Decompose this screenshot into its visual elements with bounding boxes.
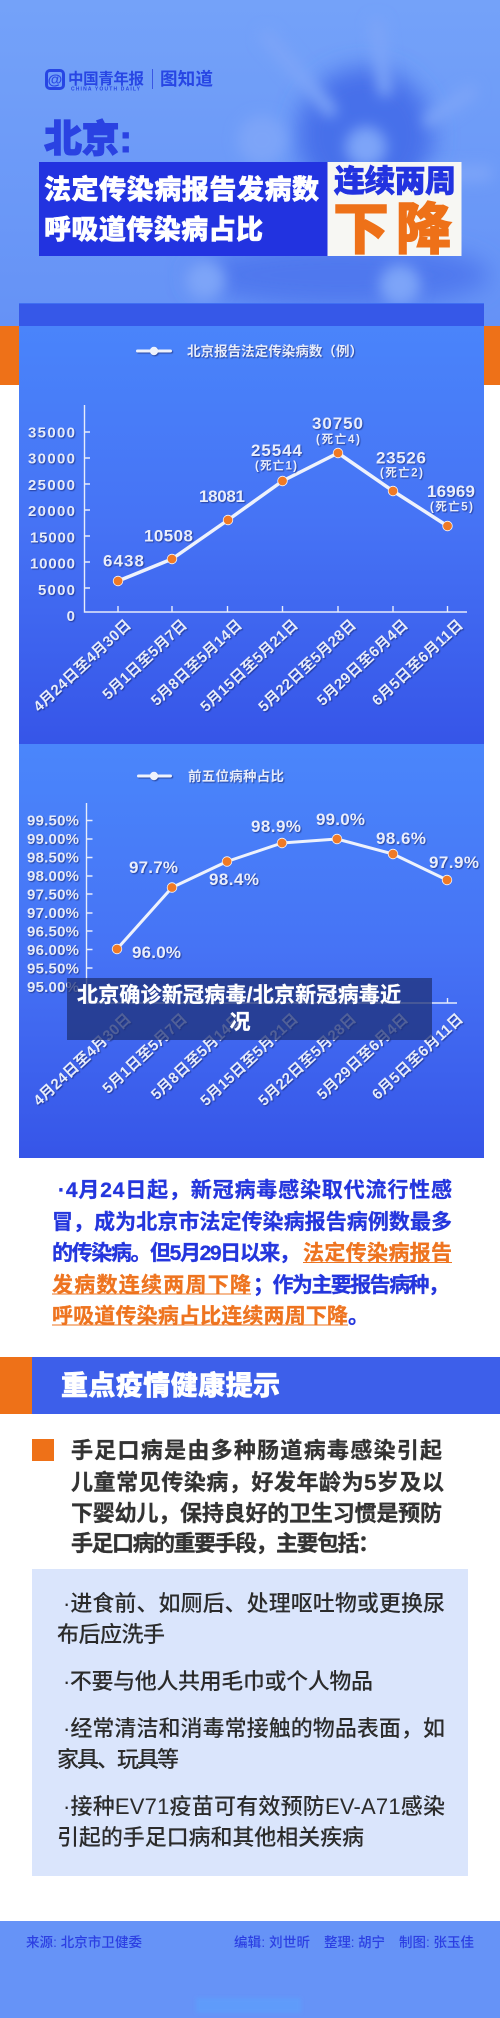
icon: orange square bullet [32, 1439, 54, 1461]
y axis labels [27, 812, 79, 996]
y axis labels: 99.00% [27, 831, 79, 848]
measure 1: ·进食前、如厕后、处理呕吐物或更换尿 [63, 1591, 445, 1616]
overlay caption bar [67, 978, 432, 1040]
callout line 2: 下降 [333, 198, 452, 261]
title panel: subject lines [39, 162, 328, 256]
x axis labels: 5月15日至5月21日 [197, 616, 302, 716]
footer [0, 1921, 500, 2018]
measure 1: 布后应洗手 [57, 1622, 165, 1647]
line series [117, 839, 447, 949]
x axis labels: 5月15日至5月21日 [197, 1010, 302, 1110]
data labels: (死亡5) [430, 500, 473, 514]
data labels: 23526 [376, 448, 426, 468]
intro line 1: 手足口病是由多种肠道病毒感染引起 [71, 1438, 442, 1463]
data labels: 98.4% [209, 870, 259, 889]
summary line 3: 的传染病。但5月29日以来， [52, 1242, 300, 1265]
source credit: 来源: 北京市卫健委 [26, 1934, 142, 1950]
logo english name: CHINA YOUTH DAILY [71, 86, 141, 92]
panel: top five diseases share chart [19, 744, 484, 1158]
caption line 1: 北京确诊新冠病毒/北京新冠病毒近 [77, 983, 401, 1007]
header background with virus [0, 0, 500, 326]
data labels: 97.9% [429, 853, 479, 872]
data labels: 10508 [144, 526, 193, 546]
y axis labels: 96.50% [27, 924, 79, 940]
intro paragraph [71, 1438, 444, 1556]
chart legend: 北京报告法定传染病数（例） [187, 343, 363, 359]
data labels: 18081 [199, 487, 245, 506]
measure 3: ·经常清洁和消毒常接触的物品表面，如 [63, 1716, 445, 1741]
callout line 1: 连续两周 [334, 164, 456, 199]
y axis labels: 96.00% [27, 942, 79, 959]
chart legend [137, 768, 284, 784]
y axis labels: 99.50% [27, 812, 79, 830]
summary line 1: ·4月24日起，新冠病毒感染取代流行性感 [58, 1178, 452, 1202]
summary line 3 [52, 1241, 452, 1265]
x axis labels: 5月1日至5月7日 [99, 1010, 191, 1097]
x axis labels: 5月1日至5月7日 [99, 616, 191, 703]
axes [86, 803, 457, 1003]
y axis labels: 25000 [28, 477, 75, 494]
summary line 5: 。 [348, 1305, 369, 1328]
section heading: health tips [0, 1357, 500, 1414]
measure 4: 引起的手足口病和其他相关疾病 [57, 1825, 364, 1850]
intro line 3: 下婴幼儿，保持良好的卫生习惯是预防 [71, 1501, 442, 1526]
data labels: 96.0% [132, 943, 181, 962]
logo divider [152, 69, 153, 89]
measure 2: ·不要与他人共用毛巾或个人物品 [63, 1669, 373, 1694]
axes [84, 405, 467, 612]
data labels: (死亡1) [255, 458, 297, 472]
measure 1 [57, 1591, 445, 1647]
panel: prevention measures [32, 1569, 468, 1876]
data labels: 98.9% [251, 817, 301, 836]
summary line 2: 冒，成为北京市法定传染病报告病例数最多 [52, 1210, 452, 1234]
summary line 4: ；作为主要报告病种， [253, 1274, 449, 1297]
x axis labels: 5月8日至5月14日 [148, 616, 246, 709]
y axis labels: 98.00% [27, 868, 79, 885]
designer credit: 制图: 张玉佳 [399, 1935, 474, 1950]
y axis labels: 35000 [28, 424, 75, 442]
y axis labels: 97.50% [27, 886, 79, 904]
y axis labels: 15000 [30, 530, 75, 546]
title line 1: 法定传染病报告发病数 [44, 174, 319, 205]
measure 4 [57, 1794, 445, 1850]
column name: 图知道 [160, 69, 214, 89]
caption line 2: 况 [230, 1011, 250, 1034]
line series [118, 453, 448, 581]
y axis labels: 95.00% [27, 979, 79, 996]
measure 4: ·接种EV71疫苗可有效预防EV-A71感染 [63, 1794, 445, 1819]
title: Beijing: 北京: [44, 119, 132, 161]
panel: reported cases chart [19, 303, 484, 744]
data labels: (死亡4) [316, 432, 360, 446]
orange side band right [484, 326, 500, 385]
x axis labels [30, 1010, 467, 1110]
data labels: 98.6% [376, 829, 426, 848]
data labels: 97.7% [129, 858, 178, 877]
data labels: 30750 [312, 414, 363, 433]
intro line 4: 手足口病的重要手段，主要包括： [71, 1531, 380, 1556]
summary paragraph [52, 1178, 452, 1328]
y axis labels: 30000 [28, 450, 75, 468]
data labels: 99.0% [316, 810, 365, 829]
x axis labels [30, 616, 467, 716]
data labels: 6438 [103, 552, 144, 570]
summary line 4 [52, 1274, 449, 1297]
editor credit: 编辑: 刘世昕 [234, 1935, 310, 1950]
x axis labels: 5月22日至5月28日 [255, 616, 360, 716]
icon: at sign: @ [48, 72, 62, 88]
intro line 2: 儿童常见传染病，好发年龄为5岁及以 [71, 1470, 444, 1495]
y axis labels: 20000 [28, 503, 75, 520]
y axis labels [28, 424, 75, 625]
data labels: (死亡2) [380, 466, 423, 480]
logo: China Youth Daily [46, 69, 214, 92]
x axis labels: 5月22日至5月28日 [255, 1010, 360, 1110]
data labels [103, 414, 475, 570]
section heading: health tips: 重点疫情健康提示 [61, 1370, 280, 1401]
y axis labels: 10000 [30, 556, 75, 572]
blurred footer patch [196, 1998, 301, 2013]
summary line 4: 发病数连续两周下降 [52, 1274, 251, 1297]
x axis labels: 4月24日至4月30日 [30, 1010, 135, 1110]
title line 2: 呼吸道传染病占比 [44, 214, 263, 245]
data labels: 16969 [427, 482, 475, 501]
x axis labels: 4月24日至4月30日 [30, 616, 135, 716]
chart legend: 前五位病种占比 [188, 768, 284, 784]
x axis labels: 5月29日至6月4日 [314, 1010, 412, 1103]
x axis labels: 5月29日至6月4日 [314, 616, 412, 709]
measure 3: 家具、玩具等 [57, 1747, 179, 1772]
summary line 5: 呼吸道传染病占比连续两周下降 [52, 1305, 348, 1328]
orange side band left [0, 326, 19, 385]
y axis labels: 95.50% [27, 960, 79, 978]
x axis labels: 6月5日至6月11日 [369, 1010, 467, 1103]
x axis labels: 5月8日至5月14日 [148, 1010, 246, 1103]
data labels [129, 810, 479, 962]
y axis labels: 98.50% [27, 850, 79, 866]
x axis labels: 6月5日至6月11日 [369, 616, 467, 709]
measure 3 [57, 1716, 445, 1772]
data labels: 25544 [251, 441, 303, 460]
title panel: two weeks decline [328, 162, 462, 261]
logo name: 中国青年报 [68, 69, 144, 88]
y axis labels: 97.00% [27, 905, 79, 922]
summary line 3: 法定传染病报告 [303, 1241, 452, 1265]
data points [112, 834, 452, 954]
y axis labels: 5000 [38, 582, 75, 599]
compiler credit: 整理: 胡宁 [324, 1934, 385, 1950]
panel top band [19, 304, 484, 326]
data points [113, 448, 452, 586]
y axis labels: 0 [67, 608, 75, 625]
